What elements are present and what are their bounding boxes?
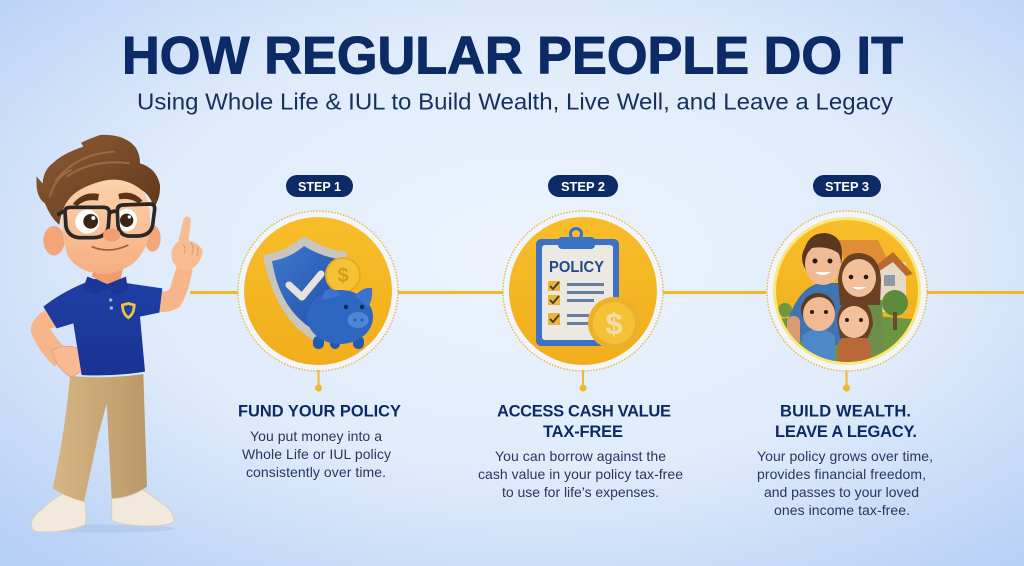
step 2 badge: STEP 2 [561,179,605,194]
step 1 description: Whole Life or IUL policy [242,446,391,462]
step 3 heading: BUILD WEALTH. [780,402,911,420]
icon: coin [326,258,360,292]
step 3 badge [813,175,881,197]
icon: piggy bank [307,288,373,349]
step 2 heading: ACCESS CASH VALUE [497,402,671,420]
step 2 pin [580,370,586,392]
step 3 description: ones income tax-free. [774,502,910,518]
title: HOW REGULAR PEOPLE DO IT [122,26,903,86]
ears [43,226,65,255]
shoes shadow [32,525,175,533]
step 3 pin [843,370,850,392]
hand pointing [171,217,203,270]
step 3 medallion [767,211,927,371]
icon: clipboard: POLICY [549,259,605,276]
step 1 badge: STEP 1 [298,179,341,194]
illustration: family and house [778,233,913,362]
icon: coin: $ [337,265,349,287]
step 2 description: to use for life’s expenses. [502,484,659,500]
glasses [57,204,155,238]
character [31,135,203,533]
checklist [548,281,604,325]
neck [92,267,123,285]
step 1 medallion [238,211,398,371]
step 3 badge: STEP 3 [825,179,869,194]
icon: dollar coin [588,297,640,349]
collar [83,277,128,296]
step 1 [238,175,401,480]
step 3 [757,175,933,518]
arm right [159,267,193,312]
step 2 medallion [503,211,663,371]
subtitle: Using Whole Life & IUL to Build Wealth, Live Well, and Leave a Legacy [137,88,893,114]
step 3 heading: LEAVE A LEGACY. [775,423,917,441]
step 2 description: cash value in your policy tax-free [478,466,683,482]
torso [43,277,162,375]
icon: shield [263,236,347,343]
step 1 description: consistently over time. [246,464,386,480]
icon: clipboard [536,228,619,346]
arm left [31,310,68,367]
eyes [75,210,99,234]
badge [121,302,136,319]
step 2 badge [548,175,618,197]
shoes [31,493,86,532]
face [62,178,150,274]
legs [53,374,147,502]
icon: dollar coin: $ [605,306,623,341]
hand on hip [52,346,88,377]
eyebrows [73,193,99,206]
step 2 description: You can borrow against the [495,448,666,464]
step 3 description: and passes to your loved [764,484,919,500]
step 3 description: Your policy grows over time, [757,448,933,464]
step 3 description: provides financial freedom, [757,466,926,482]
step 1 description: You put money into a [250,428,382,444]
step 2 [478,175,683,500]
step 1 heading: FUND YOUR POLICY [238,402,401,420]
step 1 badge [286,175,353,197]
buttons [109,298,112,302]
step 2 heading: TAX-FREE [543,423,623,441]
nose and mouth [103,228,120,242]
step 1 pin [315,370,322,392]
hair [36,135,160,225]
connector line [190,291,1024,294]
